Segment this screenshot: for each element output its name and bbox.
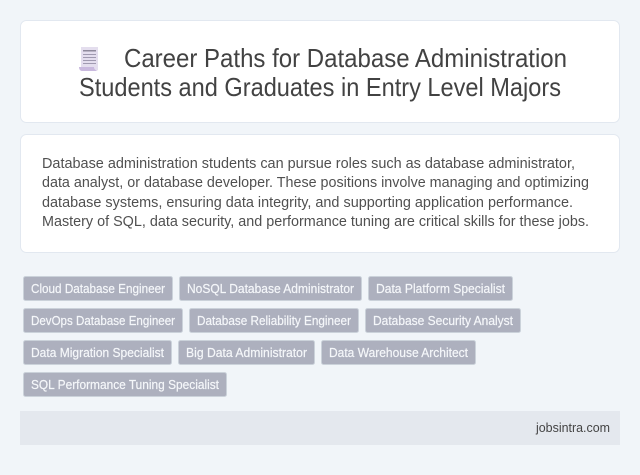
text: description line 1: Database administration students can pursue roles such as database administrator, (42, 155, 575, 172)
tag: Database Security Analyst: Database Security Analyst (373, 313, 513, 328)
tag: Database Reliability Engineer: Database Reliability Engineer (197, 313, 352, 328)
text: description line 2: data analyst, or database developer. These positions involve managing and optimizing (42, 174, 589, 191)
tag: Cloud Database Engineer (24, 276, 172, 300)
tag: Data Warehouse Architect: Data Warehouse Architect (329, 345, 468, 360)
tag: SQL Performance Tuning Specialist (24, 372, 226, 396)
footer bar (20, 411, 620, 445)
tag: Database Reliability Engineer (190, 308, 358, 332)
text: description line 3: database systems, ensuring data integrity, and supporting application performance. (42, 194, 573, 211)
panel: title card (20, 20, 620, 122)
tag: Big Data Administrator: Big Data Administrator (186, 345, 308, 360)
tag: Data Platform Specialist: Data Platform Specialist (376, 281, 505, 296)
tag: Database Security Analyst (366, 308, 520, 332)
tag: DevOps Database Engineer: DevOps Database Engineer (31, 313, 176, 328)
heading: title line 1: Career Paths for Database Administration (124, 43, 567, 73)
text: footer site name: jobsintra.com (535, 420, 610, 435)
text: description line 4: Mastery of SQL, data security, and performance tuning are critical skills for these jobs. (42, 213, 589, 230)
tag: NoSQL Database Administrator: NoSQL Database Administrator (187, 281, 355, 296)
tag: Data Platform Specialist (368, 276, 512, 300)
tag: Cloud Database Engineer: Cloud Database Engineer (31, 281, 166, 296)
tag: Data Warehouse Architect (322, 340, 476, 364)
panel: description card (20, 134, 620, 252)
tag: SQL Performance Tuning Specialist: SQL Performance Tuning Specialist (31, 377, 219, 392)
tag: Big Data Administrator (178, 340, 314, 364)
tag: Data Migration Specialist (24, 340, 172, 364)
tag: NoSQL Database Administrator (180, 276, 362, 300)
heading: title line 2: Students and Graduates in Entry Level Majors (79, 72, 561, 102)
icon: scroll document (79, 47, 98, 71)
tag: Data Migration Specialist: Data Migration Specialist (31, 345, 164, 360)
tag: DevOps Database Engineer (24, 308, 182, 332)
